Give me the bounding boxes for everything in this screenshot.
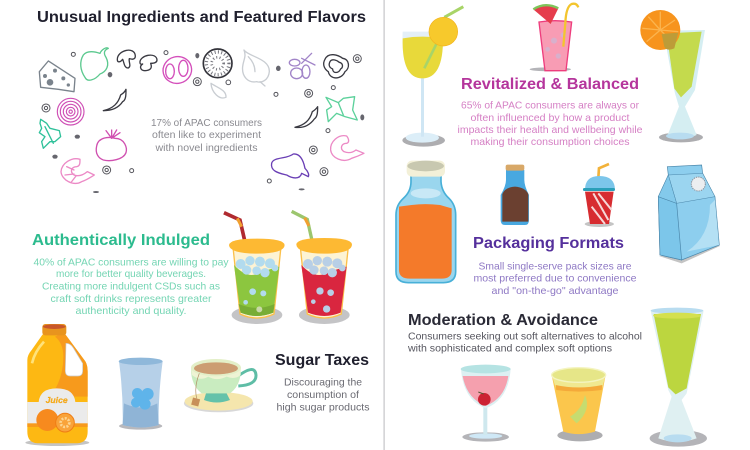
text block: sugar taxes body: consumption of <box>287 389 359 401</box>
heading: Sugar Taxes: Sugar Taxes <box>275 352 369 369</box>
icon: tomato <box>96 130 126 161</box>
text block: packaging body: and "on-the-go" advantage <box>492 285 619 297</box>
icon: red drink cup <box>292 211 352 324</box>
icon: cheese <box>39 61 75 92</box>
icon: red soda cup <box>583 164 615 227</box>
icon: cocktail with cherry <box>461 365 511 442</box>
text block: sugar taxes body: high sugar products <box>276 402 370 414</box>
icon: pepper ring <box>324 55 348 78</box>
text block: moderation body <box>407 330 642 354</box>
heading: Moderation & Avoidance: Moderation & Avoidance <box>408 312 598 329</box>
icon: milk carton <box>658 165 720 263</box>
panel: packaging formats <box>396 161 720 283</box>
heading: Authentically Indulged: Authentically Indulged <box>32 232 210 249</box>
text block: experiment stat: with novel ingredients <box>154 142 258 154</box>
label text: Juice: Juice <box>46 395 68 405</box>
icon: chili left <box>103 89 126 111</box>
panel: revitalized drinks <box>402 4 705 147</box>
icon: chili right <box>295 107 318 127</box>
icon: small brown bottle <box>501 165 529 225</box>
text block: indulged body: 40% of APAC consumers are willing to pay <box>34 256 229 268</box>
icons: peppercorns <box>42 51 361 183</box>
icon: citrus shot glass <box>552 368 606 441</box>
icon: large juice bottle <box>396 161 456 283</box>
text block: experiment stat <box>151 117 262 154</box>
text block: packaging body: most preferred due to convenience <box>474 272 637 284</box>
text block: revitalized body: 65% of APAC consumers are always or <box>461 100 639 112</box>
text block: revitalized body: impacts their health and wellbeing while <box>458 124 643 136</box>
text block: indulged body: authenticity and quality. <box>76 305 186 317</box>
icon: green flute with orange <box>640 10 705 142</box>
icon: onion <box>57 98 84 125</box>
panel: ingredient doodles <box>39 48 364 193</box>
heading: Revitalized & Balanced: Revitalized & Balanced <box>461 76 639 93</box>
icon: tea cup <box>184 359 256 412</box>
text block: sugar taxes body: Discouraging the <box>284 376 362 388</box>
icon: juice jug <box>25 324 89 446</box>
title: Unusual Ingredients and Featured Flavors <box>37 9 366 26</box>
text block: revitalized body: often influenced by how a product <box>470 112 630 124</box>
icon: parsley <box>39 119 61 148</box>
icon: shrimp left <box>61 159 94 183</box>
text block: indulged body <box>34 256 229 317</box>
text block: indulged body: more for better quality beverages. <box>56 268 206 280</box>
icons: seeds <box>52 53 364 193</box>
panel: moderation drinks <box>461 308 707 447</box>
icon: shrimp right <box>331 136 364 160</box>
icon: garlic <box>211 50 269 98</box>
icon: pizza <box>203 49 232 78</box>
text block: revitalized body <box>458 100 643 148</box>
icon: tomato slice <box>160 53 195 87</box>
text block: indulged body: craft soft drinks represents greater <box>50 293 212 305</box>
heading: Packaging Formats: Packaging Formats <box>473 235 624 252</box>
icon: basil <box>326 97 357 122</box>
text block: experiment stat: often like to experiment <box>152 129 261 141</box>
text block: packaging body: Small single-serve pack sizes are <box>478 260 632 272</box>
text block: indulged body: Creating more indulgent CSDs such as <box>42 280 220 292</box>
icon: mushrooms <box>117 50 157 71</box>
text block: moderation body: Consumers seeking out soft alternatives to alcohol <box>408 330 642 342</box>
text block: packaging body <box>474 260 637 297</box>
icon: pink glass with watermelon <box>530 4 578 71</box>
icon: green pepper <box>81 48 108 80</box>
text block: revitalized body: making their consumption choices <box>470 136 630 148</box>
text block: experiment stat: 17% of APAC consumers <box>151 117 262 129</box>
icon: purple pepper <box>271 154 309 178</box>
icon: tall green glass <box>650 308 707 447</box>
icons: two drink cups <box>224 211 352 324</box>
text block: moderation body: with sophisticated and complex soft options <box>407 342 612 354</box>
icon: green drink cup <box>224 213 285 324</box>
icon: olives <box>289 53 315 79</box>
icon: glass of ice water <box>119 358 163 430</box>
text block: sugar taxes body <box>276 376 370 414</box>
icon: yellow wine glass <box>402 7 463 147</box>
